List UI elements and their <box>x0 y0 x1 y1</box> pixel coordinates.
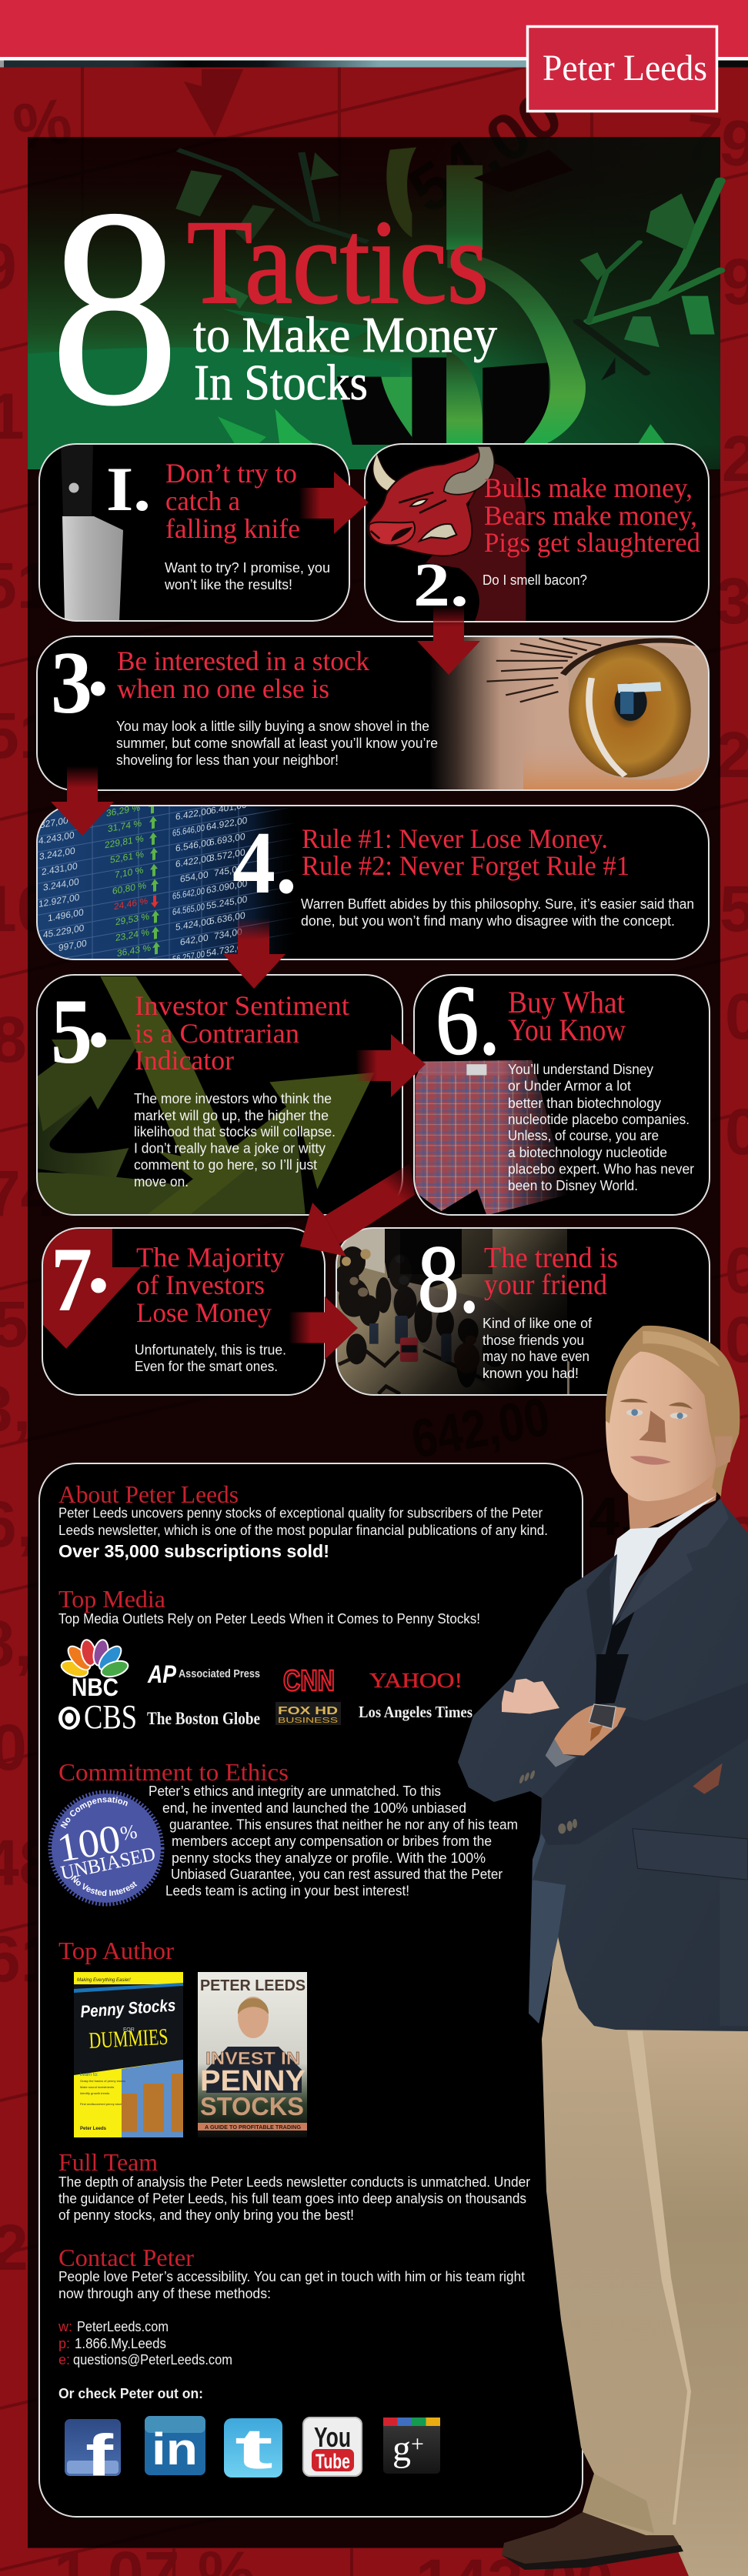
panel 6: buy what you know: a biotechnology nucleotide <box>508 1145 667 1160</box>
photo: stock price table: 52,61 % <box>110 849 144 866</box>
badge: 100% unbiased: 100 <box>54 1817 124 1871</box>
text: full team: of penny stocks, and they only bring you the best! <box>58 2207 354 2223</box>
shoe <box>502 2512 683 2568</box>
logo: Associated Press: AP <box>147 1660 177 1688</box>
text: ethics: guarantee. This ensures that neither he nor any of his team <box>169 1817 518 1833</box>
arrow: panel 5 to 6 <box>356 1034 426 1097</box>
photo: stock price table: 65.646,00 <box>172 823 205 839</box>
text: ethics <box>149 1784 518 1899</box>
panel 2: bulls bears pigs: Bears make money, <box>484 500 697 531</box>
icon: YouTube: You <box>314 2421 351 2453</box>
text: full team: The depth of analysis the Peter Leeds newsletter conducts is unmatched. Under <box>58 2174 530 2190</box>
panel 4: rule 1 and rule 2: done, but you won’t find many who disagree with the concept. <box>301 913 675 929</box>
panel 5: contrarian indicator: The more investors who think the <box>134 1091 332 1106</box>
panel 8: the trend is your friend: known you had! <box>483 1366 579 1381</box>
photo: stock price table: 642,00 <box>180 932 209 948</box>
photo: stock price table: 45.229,00 <box>43 923 85 940</box>
callout: subscriptions sold: Over 35,000 subscriptions sold! <box>58 1541 329 1561</box>
line: In Stocks: In Stocks <box>194 355 368 411</box>
panel 6: buy what you know: You’ll understand Disney <box>508 1062 653 1077</box>
logo: Fox HD Business <box>275 1702 341 1725</box>
panel 4: rule 1 and rule 2 <box>37 762 709 1025</box>
background: red stock-ticker field: 54,00 <box>396 76 574 227</box>
panel 4: rule 1 and rule 2: Warren Buffett abides by this philosophy. Sure, it’s easier said than <box>301 896 694 912</box>
icon: Google Plus: + <box>411 2431 424 2457</box>
badge: 100% unbiased: % <box>119 1820 139 1845</box>
panel 3: interested when no one else is: shoveling for less than your neighbor! <box>116 752 339 768</box>
heading: Top Media: Top Media <box>58 1585 165 1613</box>
numeral 8: 8. <box>418 1226 479 1332</box>
text: contact <box>58 2269 525 2301</box>
text: about: Peter Leeds uncovers penny stocks of exceptional quality for subscribers of the Peter <box>58 1505 543 1520</box>
panel 2: bulls bears pigs: Pigs get slaughtered <box>484 527 700 558</box>
faint ticker numbers inside panel: 642,00 <box>407 1386 554 1470</box>
shoe sole <box>502 2545 683 2570</box>
panel 6: buy what you know: nucleotide placebo companies. <box>508 1112 690 1127</box>
numeral 3: . <box>87 616 109 714</box>
icon: knife <box>61 444 123 621</box>
graphic: red down arrow behind number <box>42 1228 141 1349</box>
book: Invest in Penny Stocks: A GUIDE TO PROFITABLE TRADING <box>205 2125 302 2131</box>
icon: Twitter <box>224 2417 282 2481</box>
panel 6: buy what you know <box>414 965 710 1222</box>
book: Invest in Penny Stocks <box>198 1972 307 2137</box>
photo: stock price table: 327,00 <box>40 815 68 830</box>
logo: NBC <box>59 1639 130 1701</box>
text: full team: the guidance of Peter Leeds, his full team goes into deep analysis on thousands <box>58 2191 526 2207</box>
icon: YouTube: Tube <box>316 2450 350 2473</box>
panel 5: contrarian indicator: I don’t really have a joke or witty <box>134 1140 326 1156</box>
photo: stock price table: 3.242,00 <box>39 845 75 862</box>
panel 7: majority lose money: of Investors <box>136 1270 265 1300</box>
photo: stock price table: 997,00 <box>58 938 87 953</box>
icon: Facebook <box>65 2419 121 2488</box>
text: ethics: Peter’s ethics and integrity are unmatched. To this <box>149 1784 441 1799</box>
panel 7: majority lose money: Unfortunately, this is true. <box>135 1342 286 1357</box>
icon: angry red bull <box>368 446 526 627</box>
photo: stock price table: 6.422,00 <box>175 853 212 869</box>
photo: stock price table: 7,10 % <box>115 865 144 880</box>
text: ethics: penny stocks they analyze or profile. With the 100% <box>172 1850 486 1866</box>
panel 2: bulls bears pigs: 2. <box>413 552 469 619</box>
panel 4: rule 1 and rule 2: Rule #1: Never Lose Money. <box>302 823 608 854</box>
panel 6: buy what you know: Unless, of course, you are <box>508 1128 659 1143</box>
panel 7: majority lose money: Even for the smart ones. <box>135 1359 278 1374</box>
panel 5: contrarian indicator: comment to go here, so I’ll just <box>134 1157 317 1173</box>
jacket details <box>586 1499 729 1693</box>
book: Penny Stocks for Dummies: Find undiscovered penny stocks <box>80 2102 124 2106</box>
panel 1: falling knife: won’t like the results! <box>164 577 292 592</box>
text: contact: People love Peter’s accessibility. You can get in touch with him or his team right <box>58 2269 525 2284</box>
book: Penny Stocks for Dummies: FOR <box>123 2027 135 2033</box>
photo: stock price table: 745,00 <box>214 863 242 879</box>
photo: stock price table: 36,43 % <box>117 942 151 959</box>
photo: stock price table: 56.257,00 <box>172 949 205 965</box>
photo: stock price table: 734,00 <box>214 926 242 942</box>
numeral 7: 7 <box>51 1228 92 1330</box>
panel 3: interested when no one else is: You may look a little silly buying a snow shovel in the <box>116 719 429 734</box>
photo: stock price table: 29,53 % <box>115 911 149 928</box>
text: about: Leeds newsletter, which is one of the most popular financial publications of any kind. <box>58 1523 548 1538</box>
faint ticker numbers inside panel: 4, <box>589 1487 635 1547</box>
photo: stock price table: 654,00 <box>180 869 209 885</box>
panel 1: falling knife: Want to try? I promise, you <box>165 560 330 576</box>
panel 3: interested when no one else is <box>36 636 710 791</box>
panel 5: contrarian indicator: likelihood that stocks will collapse. <box>134 1124 336 1140</box>
panel 2: bulls bears pigs: Bulls make money, <box>484 472 693 503</box>
panel 1: falling knife: falling knife <box>165 513 300 544</box>
text: ethics: Leeds team is acting in your best interest! <box>165 1884 409 1899</box>
book: Penny Stocks for Dummies: Grasp the basics of penny stocks <box>80 2079 125 2083</box>
numeral 7 <box>51 1210 110 1330</box>
photo: stock price table: 6.546,00 <box>175 837 212 854</box>
panel 1: falling knife <box>39 444 349 621</box>
photo: Peter Leeds standing with crossed arms <box>458 1326 748 2576</box>
panel 5: contrarian indicator: Investor Sentiment <box>135 990 349 1021</box>
panel 2: bulls bears pigs <box>365 444 709 627</box>
photo: stock price table: 6.693,00 <box>209 831 245 848</box>
panel 5: contrarian indicator: is a Contrarian <box>135 1018 299 1049</box>
arrow: panel 7 to 8 <box>289 1296 358 1360</box>
icon: Twitter: t <box>235 2417 273 2481</box>
contact details: w: <box>58 2319 72 2334</box>
panel 2: bulls bears pigs: Do I smell bacon? <box>483 572 587 588</box>
contact details: questions@PeterLeeds.com <box>73 2352 232 2367</box>
contact details <box>58 2319 232 2367</box>
photo: stock price table: 60,80 % <box>112 880 146 896</box>
photo: stock price table: 63.090,00 <box>206 878 248 896</box>
contact details: PeterLeeds.com <box>77 2319 169 2334</box>
text: full team <box>58 2174 530 2223</box>
book: Invest in Penny Stocks: INVEST IN <box>205 2048 300 2068</box>
panel 8: the trend is your friend: may no have even <box>483 1349 589 1364</box>
panel 6: buy what you know: You Know <box>508 1013 626 1047</box>
book: Invest in Penny Stocks: PENNY <box>200 2065 306 2097</box>
logo: Fox HD Business: FOX HD <box>278 1704 338 1717</box>
panel 5: contrarian indicator: market will go up, the higher the <box>134 1108 329 1123</box>
panel 3: interested when no one else is: summer, but come snowfall at least you’ll know you’re <box>116 736 438 751</box>
logo: Peter Leeds <box>528 26 717 111</box>
logo: Associated Press <box>147 1660 260 1688</box>
background: red stock-ticker field: % <box>8 84 75 164</box>
contact details: 1.866.My.Leeds <box>75 2336 166 2351</box>
photo: stock price table: 55.245,00 <box>206 893 248 912</box>
icon: LinkedIn: in <box>152 2424 198 2474</box>
photo: stock price table: 64.922,00 <box>206 815 248 833</box>
logo: CNN: CNN <box>283 1665 335 1697</box>
big numeral 8: 8 <box>49 150 180 465</box>
line: to Make Money: to Make Money <box>193 307 497 363</box>
book: Penny Stocks for Dummies: Making Everything Easier! <box>77 1978 131 1983</box>
text: ethics: Unbiased Guarantee, you can rest assured that the Peter <box>171 1867 503 1882</box>
logo: Peter Leeds: Peter Leeds <box>543 48 707 88</box>
text: ethics: end, he invented and launched the 100% unbiased <box>162 1800 466 1816</box>
logo: The Boston Globe: The Boston Globe <box>147 1709 260 1728</box>
photo: stock price table: 23,24 % <box>115 926 149 943</box>
arrow: panel 6 to 7 <box>300 1163 415 1256</box>
panel: about Peter Leeds <box>38 1433 614 2518</box>
photo: stock price table <box>38 806 292 959</box>
logos: media outlets <box>58 1639 473 1736</box>
heading: Full Team: Full Team <box>58 2148 158 2176</box>
panel 1: falling knife: Don’t try to <box>165 458 297 489</box>
panel 4: rule 1 and rule 2: Rule #2: Never Forget Rule #1 <box>302 850 629 881</box>
title <box>49 150 497 465</box>
faint ticker numbers inside panel <box>396 76 635 1547</box>
panel 5: contrarian indicator: Indicator <box>135 1045 234 1076</box>
photo: stock price table: 5.636,00 <box>209 909 245 927</box>
text: about <box>58 1505 548 1538</box>
photo: close-up eye <box>429 636 712 792</box>
photo: stock price table: 229,81 % <box>105 833 144 850</box>
panel 6: buy what you know: placebo expert. Who has never <box>508 1162 694 1177</box>
panel 3: interested when no one else is: Be interested in a stock <box>117 646 369 676</box>
numeral 5: . <box>87 964 110 1067</box>
photo: stock price table: 3.244,00 <box>43 876 79 893</box>
numeral 6: 6. <box>436 965 500 1075</box>
photo: plaid boxer shorts <box>415 1060 564 1214</box>
photo: stock price table: 12.927,00 <box>38 892 80 909</box>
heading: About Peter Leeds: About Peter Leeds <box>58 1480 239 1508</box>
logo: Fox HD Business: BUSINESS <box>278 1717 338 1725</box>
badge: 100% unbiased: UNBIASED <box>58 1843 158 1884</box>
badge: 100% unbiased: No Compensation <box>60 1797 128 1828</box>
photo: stock price table: 5.424,00 <box>175 916 212 933</box>
panel 3: interested when no one else is: when no one else is <box>117 673 329 704</box>
photo: stock price table: 64.565,00 <box>172 901 205 917</box>
panel 8: the trend is your friend <box>333 1226 710 1395</box>
panel 6: buy what you know: better than biotechnology <box>508 1096 661 1111</box>
arms, hands and watch <box>502 1654 748 2026</box>
panel 5: contrarian indicator <box>28 964 402 1216</box>
panel 5: contrarian indicator: move on. <box>134 1174 189 1190</box>
photo: stock price table: 2.431,00 <box>42 860 78 877</box>
text: contact: now through any of these methods: <box>58 2286 271 2301</box>
icon: YouTube <box>303 2418 362 2476</box>
numeral 5 <box>51 964 110 1083</box>
photo: stock price table: 1.496,00 <box>48 906 84 924</box>
shirt <box>610 1495 717 1625</box>
hero: green money tree and dollar sign <box>28 137 720 469</box>
panel 6: buy what you know: or Under Armor a lot <box>508 1079 631 1094</box>
heading: Commitment to Ethics: Commitment to Ethics <box>58 1758 289 1786</box>
panel 1: falling knife: I. <box>106 454 151 524</box>
arrow: panel 2 to 3 <box>417 606 480 675</box>
badge: 100% unbiased <box>48 1790 165 1907</box>
logo: CBS: CBS <box>84 1698 137 1736</box>
panel 8: the trend is your friend: those friends you <box>483 1333 584 1348</box>
arrow: panel 1 to 2 <box>299 472 369 534</box>
book: Invest in Penny Stocks: PETER LEEDS <box>200 1977 306 1994</box>
photo: stock price table: 6.401,00 <box>211 799 247 816</box>
numeral 3: 3 <box>51 634 92 732</box>
book: Invest in Penny Stocks: STOCKS <box>200 2092 304 2121</box>
numeral 3 <box>51 616 109 732</box>
photo: stock price table: 3.572,00 <box>209 846 245 864</box>
numeral 5: 5 <box>51 980 92 1083</box>
photo: stock price table: 36,29 % <box>106 802 140 819</box>
text: or check Peter out on: Or check Peter out on: <box>58 2386 203 2401</box>
photo: stock price table: 31,74 % <box>108 818 142 834</box>
icon: LinkedIn <box>145 2416 205 2475</box>
photo: stock price table: 6.422,00 <box>175 806 212 823</box>
book: Penny Stocks for Dummies: Learn to: <box>80 2073 99 2077</box>
contact details: p: <box>58 2336 70 2351</box>
photo: stock price table: 4.243,00 <box>38 829 75 846</box>
panel 6: buy what you know: been to Disney World. <box>508 1178 638 1193</box>
icon: Google Plus <box>383 2418 440 2474</box>
icon: Google Plus: g <box>392 2428 411 2469</box>
icon: Facebook: f <box>85 2423 114 2488</box>
panel 8: the trend is your friend: Kind of like one of <box>483 1316 593 1331</box>
jacket <box>458 1499 748 2031</box>
panel 7: majority lose money: Lose Money <box>136 1297 272 1328</box>
photo: crowd in a lobby <box>333 1228 569 1395</box>
word: Tactics: Tactics <box>187 195 489 329</box>
logo: Yahoo: YAHOO! <box>369 1669 462 1692</box>
badge: 100% unbiased: No Vested Interest <box>71 1875 137 1896</box>
numeral 7: . <box>87 1210 110 1312</box>
book: Penny Stocks for Dummies <box>74 1972 183 2137</box>
book: Penny Stocks for Dummies: Peter Leeds <box>80 2127 107 2131</box>
text: top media: Top Media Outlets Rely on Peter Leeds When it Comes to Penny Stocks! <box>58 1611 480 1627</box>
head <box>606 1326 740 1501</box>
arrow: panel 3 to 4 <box>51 766 114 836</box>
trousers <box>542 1924 748 2576</box>
logo: NBC: NBC <box>72 1673 119 1701</box>
panel 8: the trend is your friend: your friend <box>484 1269 607 1301</box>
photo: stock price table: 24,46 % <box>114 896 148 912</box>
numeral 4: 4. <box>232 814 297 912</box>
photo: stock price table: 54.732,00 <box>206 941 248 959</box>
neck <box>627 1462 720 1535</box>
book: Penny Stocks for Dummies: DUMMIES <box>88 2024 169 2054</box>
panel 8: the trend is your friend: The trend is <box>484 1242 618 1274</box>
header band <box>0 0 748 68</box>
arrow: panel 4 to 5 <box>223 918 286 989</box>
graphic: olive green arrows <box>28 976 375 1216</box>
faint ticker numbers inside panel: 54,00 <box>396 76 574 227</box>
logo: Los Angeles Times: Los Angeles Times <box>359 1703 473 1721</box>
logo: CBS <box>58 1698 137 1736</box>
panel 7: majority lose money <box>42 1210 325 1395</box>
photo: stock price table: 65.642,00 <box>172 886 205 902</box>
text: ethics: members accept any compensation or bribes from the <box>172 1834 492 1849</box>
logo: Associated Press: Associated Press <box>179 1667 260 1680</box>
heading: Contact Peter: Contact Peter <box>58 2244 194 2271</box>
panel 6: buy what you know: Buy What <box>508 985 625 1019</box>
book: Penny Stocks for Dummies: Identify growth trends <box>80 2091 109 2095</box>
book: Penny Stocks for Dummies: Make sound investments <box>80 2085 114 2089</box>
panel 1: falling knife: catch a <box>165 486 240 516</box>
contact details: e: <box>58 2352 70 2367</box>
panel 7: majority lose money: The Majority <box>136 1242 285 1273</box>
book: Penny Stocks for Dummies: Penny Stocks <box>80 1995 176 2021</box>
heading: Top Author: Top Author <box>58 1937 174 1964</box>
